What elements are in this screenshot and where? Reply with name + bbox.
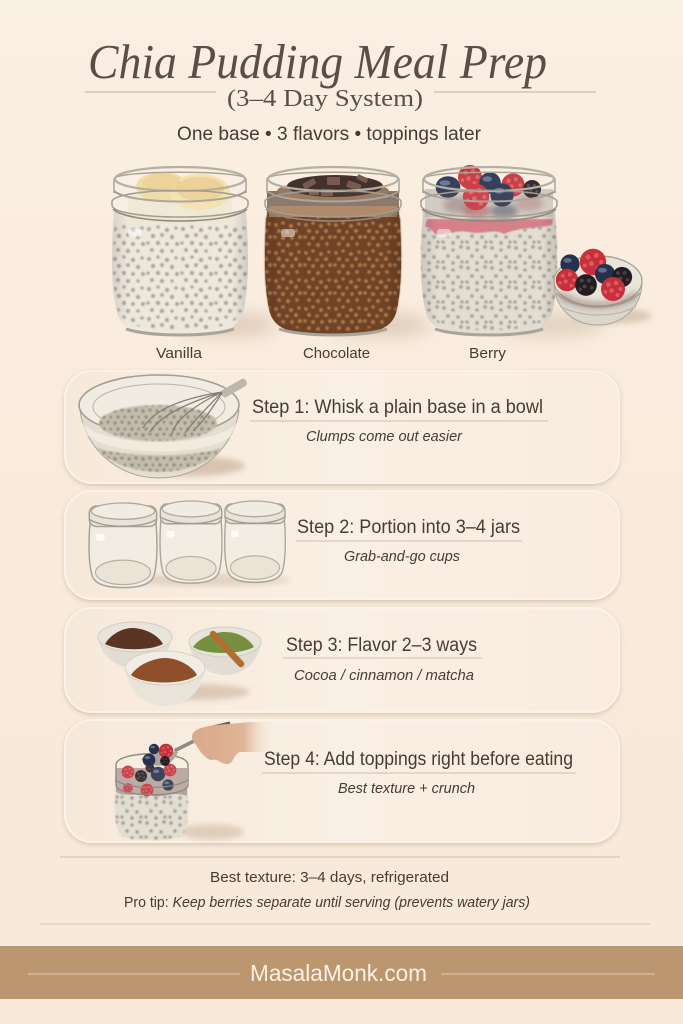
pro tip: Pro tip: Keep berries separate until serving (prevents watery jars) <box>124 894 530 911</box>
step 2 heading: Step 2: Portion into 3–4 jars <box>297 517 520 538</box>
jar: berry <box>421 165 604 337</box>
icon: three empty jars <box>89 501 290 588</box>
storage note: Best texture: 3–4 days, refrigerated <box>210 869 449 886</box>
jar: chocolate <box>265 167 431 337</box>
jar: vanilla <box>112 167 278 337</box>
step 2 note: Grab-and-go cups <box>344 548 460 565</box>
step 4 heading: Step 4: Add toppings right before eating <box>264 749 573 770</box>
step 1 heading: Step 1: Whisk a plain base in a bowl <box>252 397 543 418</box>
step 3 note: Cocoa / cinnamon / matcha <box>294 667 474 684</box>
label: vanilla: Vanilla <box>156 345 203 362</box>
footer band <box>0 946 683 999</box>
label: chocolate: Chocolate <box>303 345 370 362</box>
icon: bowl with whisk <box>79 375 248 478</box>
brand name: MasalaMonk.com <box>250 960 427 986</box>
panel: step 4 <box>65 720 619 844</box>
panel: step 2 <box>65 491 619 601</box>
tagline: One base • 3 flavors • toppings later <box>177 124 482 145</box>
step 4 note: Best texture + crunch <box>338 780 475 797</box>
title: Chia Pudding Meal Prep <box>88 34 547 89</box>
step 3 heading: Step 3: Flavor 2–3 ways <box>286 635 477 656</box>
panel: step 3 <box>65 608 619 714</box>
panel: step 1 <box>65 371 619 485</box>
icon: hand adding toppings to jar <box>115 722 272 840</box>
subtitle: (3–4 Day System) <box>227 86 423 112</box>
label: berry: Berry <box>469 345 507 362</box>
bowl of berries <box>554 249 652 325</box>
step 1 note: Clumps come out easier <box>306 428 463 445</box>
icon: spice bowls <box>98 622 261 706</box>
